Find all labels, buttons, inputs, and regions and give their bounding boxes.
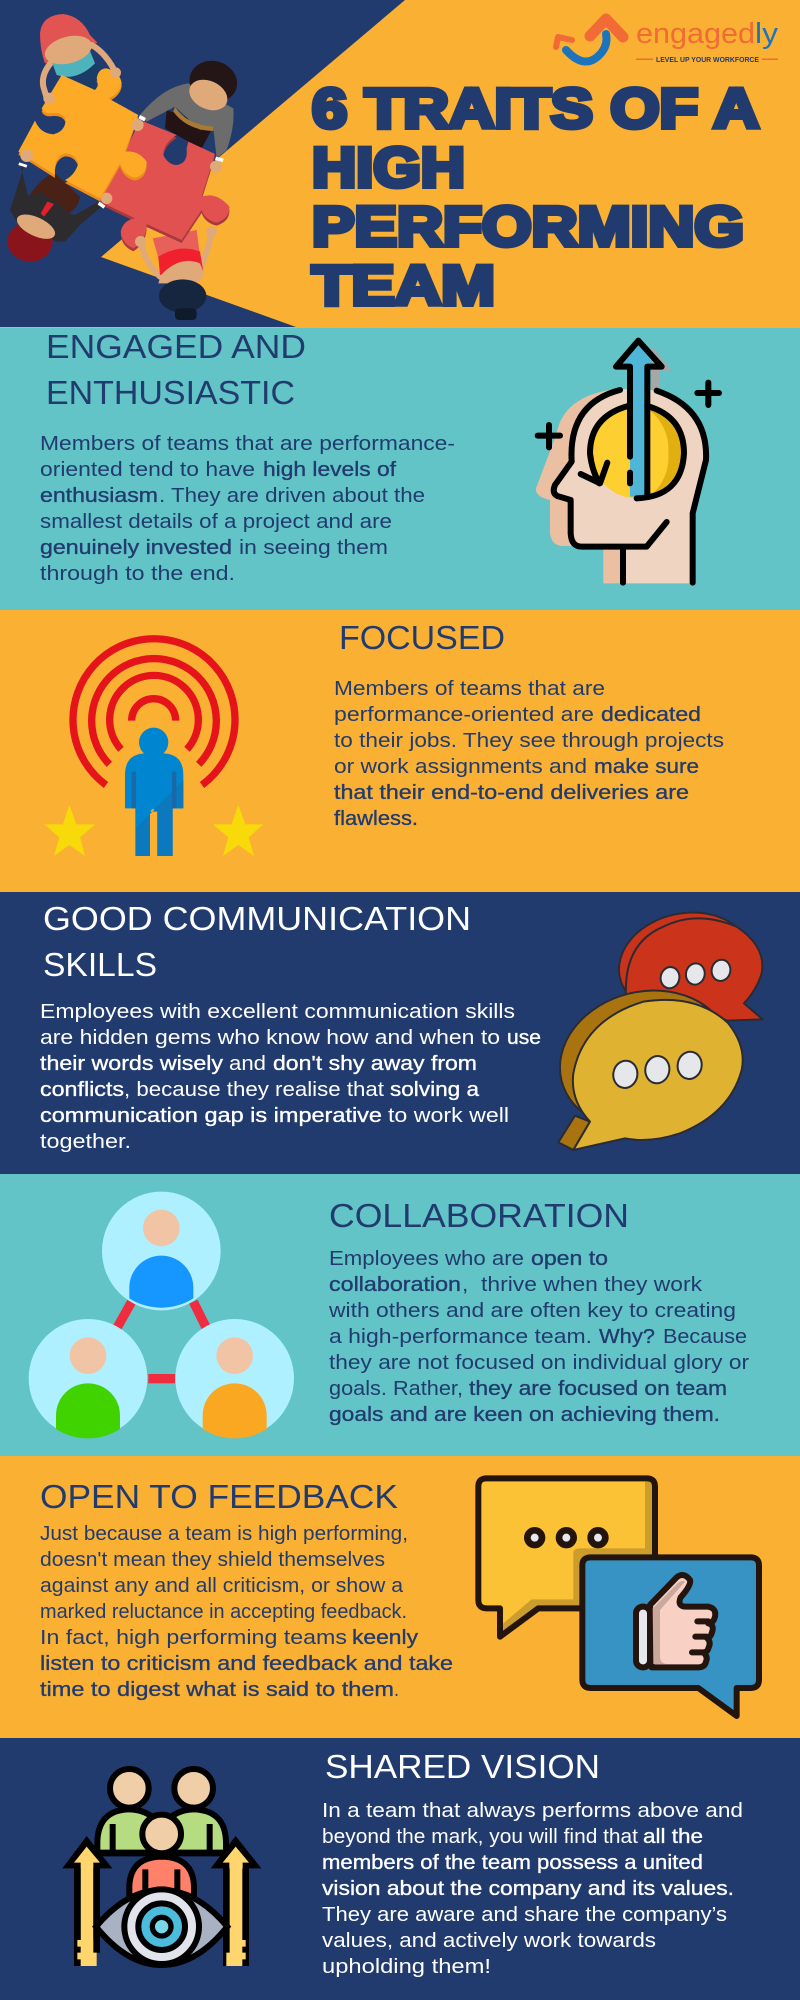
text block: engaged: Members of teams that are performance- bbox=[40, 432, 455, 455]
blue bubble bbox=[582, 1557, 759, 1716]
text block: focused: dedicated bbox=[601, 703, 701, 726]
text block: focused: that their end-to-end deliveries are bbox=[334, 781, 689, 804]
text block: collaboration: Because bbox=[663, 1325, 747, 1348]
heading: engaged and enthusiastic: ENTHUSIASTIC bbox=[46, 375, 295, 412]
icon: team with shared vision eye bbox=[62, 1769, 261, 1966]
text block: collaboration: with others and are often key to creating bbox=[328, 1299, 736, 1322]
logo: engagedly bbox=[556, 18, 779, 64]
text block: feedback: marked reluctance in accepting feedback. bbox=[40, 1600, 407, 1623]
text block: collaboration bbox=[328, 1247, 749, 1426]
text block: communication: conflicts bbox=[40, 1078, 124, 1101]
text block: focused: Members of teams that are bbox=[334, 677, 605, 700]
person: bottom, red top bbox=[142, 230, 212, 320]
panel: header bbox=[0, 0, 800, 328]
text block: feedback: Just because a team is high performing, bbox=[40, 1522, 408, 1545]
back people bbox=[97, 1769, 226, 1853]
text block: feedback: listen to criticism and feedback and take bbox=[40, 1652, 453, 1675]
person: top blue bbox=[102, 1192, 221, 1310]
text block: focused: or work assignments and bbox=[334, 755, 587, 778]
title: PERFORMING bbox=[312, 194, 744, 258]
text block: collaboration: goals. Rather, bbox=[329, 1377, 463, 1400]
text block: engaged: genuinely invested bbox=[40, 536, 232, 559]
text block: communication: and bbox=[229, 1052, 266, 1075]
text block: collaboration: open to bbox=[531, 1247, 608, 1270]
text block: focused: to their jobs. They see through projects bbox=[334, 729, 724, 752]
text block: engaged bbox=[40, 432, 455, 585]
red bubble bbox=[609, 901, 763, 1026]
title: TEAM bbox=[312, 254, 495, 316]
text block: focused bbox=[334, 677, 724, 830]
person: top right, grey top bbox=[140, 55, 242, 158]
text block: focused: make sure bbox=[594, 755, 699, 778]
text block: communication bbox=[40, 1000, 541, 1153]
text block: feedback: keenly bbox=[352, 1626, 419, 1649]
text block: shared vision: beyond the mark, you will find that bbox=[322, 1825, 638, 1848]
icon: head with upward arrow bbox=[536, 340, 719, 583]
text block: engaged: smallest details of a project and are bbox=[40, 510, 392, 533]
text block: engaged: enthusiasm bbox=[40, 484, 158, 507]
text block: engaged: oriented tend to have bbox=[40, 458, 255, 481]
icon: person under signal arcs with stars bbox=[44, 639, 263, 856]
text block: shared vision: all the bbox=[643, 1825, 703, 1848]
heading: good communication skills bbox=[43, 901, 471, 984]
text block: communication: don't shy away from bbox=[273, 1052, 477, 1075]
heading: engaged and enthusiastic bbox=[46, 329, 306, 412]
text block: communication: solving a bbox=[390, 1078, 480, 1101]
text block: collaboration: goals and are keen on achieving them. bbox=[329, 1403, 720, 1426]
text block: engaged: through to the end. bbox=[40, 562, 235, 585]
text block: communication: are hidden gems who know how and when to bbox=[40, 1026, 500, 1049]
illustration: four people holding puzzle pieces bbox=[7, 14, 242, 320]
yellow bubble bbox=[478, 1478, 655, 1637]
panel: good communication skills bbox=[0, 892, 800, 1174]
icon: speech bubbles with thumbs up bbox=[478, 1478, 759, 1716]
logo: engagedly: LEVEL UP YOUR WORKFORCE bbox=[656, 57, 759, 64]
text block: shared vision: values, and actively work towards bbox=[322, 1929, 656, 1952]
logo: engagedly: ly bbox=[755, 18, 779, 50]
text block: communication: use bbox=[507, 1026, 541, 1049]
text block: feedback: In fact, high performing teams bbox=[40, 1626, 347, 1649]
stars bbox=[44, 805, 263, 856]
right arrow bbox=[74, 1836, 261, 1966]
text block: communication: their words wisely bbox=[40, 1052, 224, 1075]
text block: communication: to work well bbox=[388, 1104, 509, 1127]
heading: focused: FOCUSED bbox=[339, 620, 505, 657]
panel: focused bbox=[0, 610, 800, 892]
title: 6 TRAITS OF A bbox=[312, 76, 759, 140]
icon: speech bubbles bbox=[545, 901, 763, 1150]
puzzle piece: red bbox=[100, 120, 229, 251]
text block: communication: together. bbox=[40, 1130, 131, 1153]
text block: feedback: . bbox=[394, 1678, 399, 1701]
yellow bubble bbox=[545, 973, 745, 1150]
heading: engaged and enthusiastic: ENGAGED AND bbox=[46, 329, 306, 366]
person bbox=[125, 728, 183, 856]
heading: good communication skills: SKILLS bbox=[43, 947, 157, 984]
panel: engaged and enthusiastic bbox=[0, 328, 800, 610]
heading: open to feedback: OPEN TO FEEDBACK bbox=[40, 1479, 398, 1516]
text block: focused: performance-oriented are bbox=[334, 703, 594, 726]
text block: engaged: in seeing them bbox=[239, 536, 388, 559]
heading: good communication skills: GOOD COMMUNICATION bbox=[43, 901, 471, 938]
text block: shared vision: upholding them! bbox=[322, 1955, 491, 1978]
text block: shared vision bbox=[322, 1799, 743, 1978]
logo icon bbox=[556, 19, 623, 62]
hands on puzzle bbox=[18, 67, 224, 247]
text block: collaboration: a high-performance team. bbox=[329, 1325, 592, 1348]
text block: feedback: doesn't mean they shield themselves bbox=[40, 1548, 385, 1571]
left arrow bbox=[62, 1836, 112, 1966]
person: left green bbox=[29, 1319, 147, 1438]
signal arcs bbox=[73, 639, 235, 785]
text block: collaboration: , thrive when they work bbox=[462, 1273, 703, 1296]
text block: collaboration: they are not focused on individual glory or bbox=[329, 1351, 749, 1374]
puzzle piece: yellow bbox=[18, 68, 147, 201]
panel: shared vision bbox=[0, 1738, 800, 2000]
front person bbox=[97, 1815, 226, 1897]
text block: collaboration: Employees who are bbox=[329, 1247, 524, 1270]
panel: open to feedback bbox=[0, 1456, 800, 1738]
text block: engaged: high levels of bbox=[263, 458, 396, 481]
text block: feedback: against any and all criticism, or show a bbox=[40, 1574, 404, 1597]
title: HIGH bbox=[312, 136, 465, 198]
text block: collaboration: they are focused on team bbox=[469, 1377, 727, 1400]
title bbox=[312, 76, 759, 316]
text block: shared vision: members of the team possess a united bbox=[322, 1851, 703, 1874]
eye bbox=[96, 1889, 227, 1965]
person: right orange bbox=[175, 1319, 294, 1438]
text block: communication: communication gap is imperative bbox=[40, 1104, 382, 1127]
text block: shared vision: vision about the company and its values. bbox=[322, 1877, 734, 1900]
text block: communication: Employees with excellent communication skills bbox=[40, 1000, 515, 1023]
connectors bbox=[117, 1302, 206, 1379]
thumbs up hand bbox=[636, 1575, 715, 1667]
text block: communication: , because they realise that bbox=[124, 1078, 384, 1101]
text block: feedback: time to digest what is said to them bbox=[40, 1678, 394, 1701]
text block: shared vision: They are aware and share the company’s bbox=[322, 1903, 727, 1926]
text block: collaboration: collaboration bbox=[329, 1273, 461, 1296]
logo: engagedly: engaged bbox=[636, 18, 755, 50]
text block: feedback bbox=[40, 1522, 453, 1701]
text block: shared vision: In a team that always performs above and bbox=[322, 1799, 743, 1822]
icon: connected people bbox=[29, 1192, 294, 1438]
heading: shared vision: SHARED VISION bbox=[325, 1749, 600, 1786]
heading: collaboration: COLLABORATION bbox=[329, 1198, 629, 1235]
panel: collaboration bbox=[0, 1174, 800, 1456]
text block: engaged: . They are driven about the bbox=[159, 484, 425, 507]
text block: collaboration: Why? bbox=[599, 1325, 655, 1348]
text block: focused: flawless. bbox=[334, 807, 418, 830]
person: bottom left, black jacket bbox=[7, 163, 103, 262]
person: top left, red hair bbox=[40, 14, 117, 103]
